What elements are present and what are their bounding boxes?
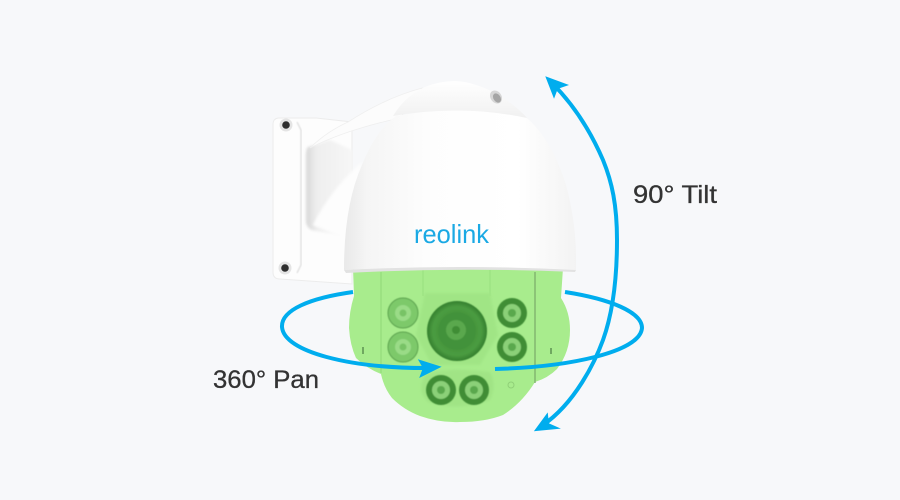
pan arrow: 360 degree ellipse bbox=[282, 292, 642, 376]
label: 90° Tilt: 90° Tilt bbox=[633, 181, 717, 209]
reolink logo: reolink bbox=[414, 219, 490, 249]
tilt arrow: 90 degree arc bbox=[536, 78, 617, 430]
wall mount bracket bbox=[273, 88, 422, 284]
green camera body bbox=[349, 268, 570, 422]
infrared LEDs bbox=[388, 298, 527, 405]
dome screw bbox=[487, 88, 505, 106]
white dome bbox=[344, 81, 576, 273]
bracket screws bbox=[278, 118, 292, 274]
label: 360° Pan: 360° Pan bbox=[213, 366, 319, 394]
main lens bbox=[427, 301, 487, 361]
